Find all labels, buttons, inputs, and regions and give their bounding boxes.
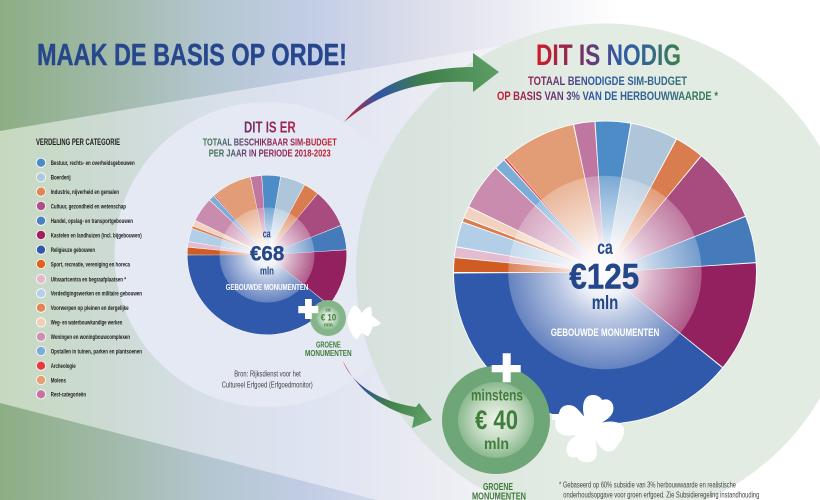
- pie chart: beschikbaar: GEBOUWDE MONUMENTEN: [226, 282, 308, 292]
- source text: Cultureel Erfgoed (Erfgoedmonitor): [222, 379, 313, 389]
- heading: dit is er: TOTAAL BESCHIKBAAR SIM-BUDGET: [203, 138, 337, 149]
- green monuments small: ca: [326, 308, 331, 314]
- title: MAAK DE BASIS OP ORDE!: [37, 37, 347, 72]
- green monuments large: mln: [484, 436, 509, 453]
- heading: dit is nodig: TOTAAL BENODIGDE SIM-BUDGET: [528, 74, 687, 88]
- pie chart: beschikbaar: mln: [260, 266, 274, 278]
- green monuments large: € 40: [475, 405, 518, 435]
- green monuments small: MONUMENTEN: [305, 349, 352, 358]
- heading: dit is nodig: OP BASIS VAN 3% VAN DE HERBOUWWAARDE *: [497, 89, 718, 103]
- legend: Kastelen en landhuizen (incl. bijgebouwen): [51, 232, 142, 239]
- legend: Cultuur, gezondheid en wetenschap: [51, 203, 126, 210]
- icon: small leaf: [347, 305, 381, 340]
- pie chart: beschikbaar: [187, 175, 347, 335]
- legend: Uitvaartcentra en begraafplaatsen *: [51, 276, 126, 283]
- panel: dit is er circle: [114, 102, 420, 407]
- heading: dit is nodig: [497, 39, 718, 103]
- pie chart: benodigd: [453, 121, 757, 424]
- pie chart: beschikbaar: €68: [250, 242, 284, 266]
- legend: [36, 137, 142, 399]
- pie chart: benodigd: mln: [592, 293, 618, 314]
- icon: clover: [552, 395, 624, 462]
- legend: Molens: [51, 377, 66, 384]
- legend title: VERDELING PER CATEGORIE: [36, 137, 120, 148]
- pie chart: benodigd: €125: [569, 257, 639, 296]
- legend: Woningen en woningbouwcomplexen: [51, 334, 130, 341]
- green monuments large: [442, 353, 550, 500]
- legend: Opstallen in tuinen, parken en plantsoenen: [51, 348, 142, 355]
- source text: [222, 369, 313, 389]
- legend: Verdedigingswerken en militaire gebouwen: [51, 291, 142, 298]
- legend: Handel, opslag- en transportgebouwen: [51, 218, 133, 225]
- legend: Bestuur, rechts- en overheidsgebouwen: [51, 160, 135, 167]
- footnote: * Gebaseerd op 60% subsidie van 3% herbouwwaarde en realistische: [559, 481, 736, 490]
- legend: Sport, recreatie, vereniging en horeca: [51, 261, 130, 268]
- legend: Religieuze gebouwen: [51, 247, 95, 254]
- legend: Weg- en waterbouwkundige werken: [51, 320, 122, 327]
- green monuments small: GROENE: [316, 341, 341, 350]
- arrow: bottom: [343, 361, 432, 428]
- heading: dit is er: PER JAAR IN PERIODE 2018-2023: [209, 149, 331, 160]
- green monuments large: GROENE: [483, 482, 513, 493]
- source text: Bron: Rijksdienst voor het: [234, 369, 301, 379]
- heading: dit is er: DIT IS ER: [244, 119, 296, 136]
- green monuments small: € 10: [321, 313, 336, 324]
- panel: dit is nodig circle: [356, 24, 820, 500]
- legend: Archeologie: [51, 363, 76, 370]
- heading: dit is er: [203, 119, 337, 160]
- legend: Boerderij: [51, 175, 71, 182]
- legend: Industrie, nijverheid en gemalen: [51, 189, 119, 196]
- heading: dit is nodig: DIT IS NODIG: [536, 39, 681, 72]
- pie chart: benodigd: GEBOUWDE MONUMENTEN: [551, 327, 659, 339]
- pie chart: beschikbaar: ca: [263, 228, 271, 240]
- green monuments large: minstens: [471, 388, 523, 405]
- pie chart: benodigd: ca: [597, 238, 613, 259]
- legend: Rest-categorieën: [51, 392, 86, 399]
- arrow: top: [344, 53, 499, 122]
- green monuments small: [298, 299, 381, 358]
- green monuments small: mln: [324, 322, 333, 328]
- legend: Voorwerpen op pleinen en dergelijke: [51, 305, 129, 312]
- icon: plus: [492, 353, 521, 382]
- footnote: [559, 481, 759, 499]
